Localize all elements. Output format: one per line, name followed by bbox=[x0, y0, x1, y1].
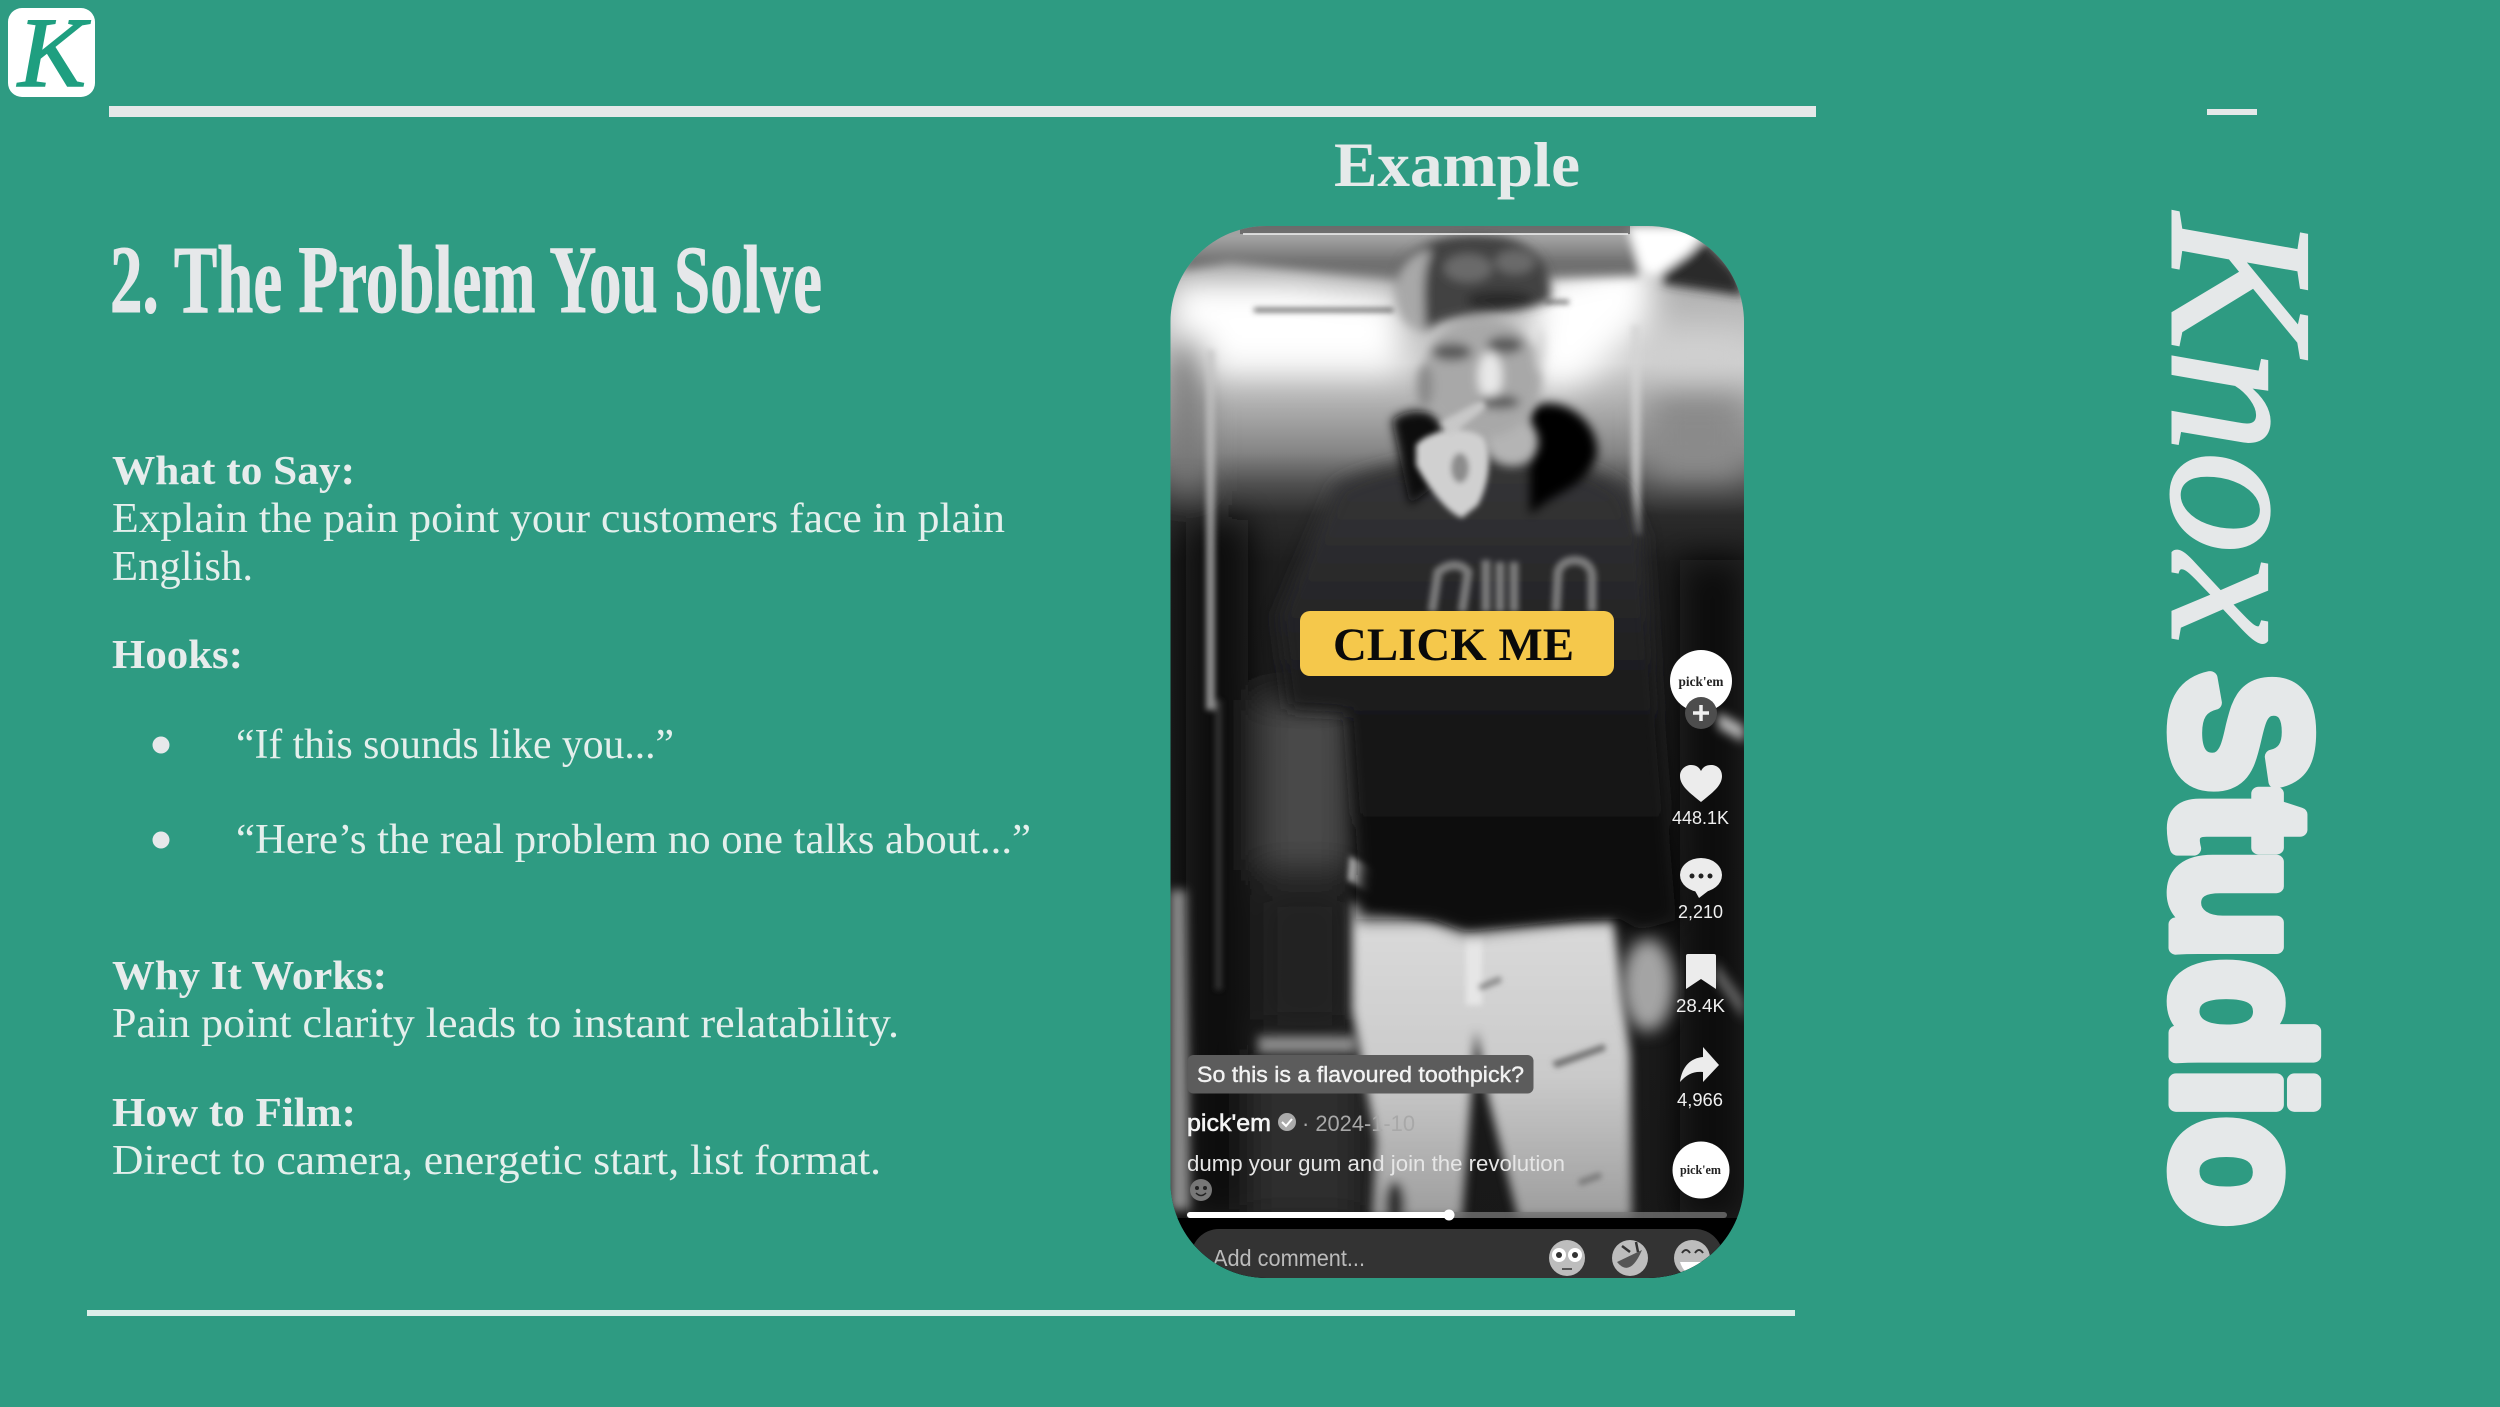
text block: why it works: Why It Works: bbox=[112, 952, 387, 998]
bottom black bar bbox=[1170, 1218, 1745, 1278]
username and date: · 2024-1-10 bbox=[1302, 1111, 1415, 1136]
elevator door frames bbox=[1206, 300, 1641, 990]
username and date bbox=[1188, 1113, 1414, 1136]
comment caption bbox=[1188, 1055, 1534, 1094]
comment bar bbox=[1194, 1229, 1720, 1278]
emoji: flushed bbox=[1549, 1240, 1585, 1276]
text block: how to film: Direct to camera, energetic start, list format. bbox=[112, 1138, 881, 1184]
click me button bbox=[1300, 611, 1614, 676]
click me button: CLICK ME bbox=[1333, 619, 1574, 671]
icon: share with count: 4,966 bbox=[1677, 1090, 1723, 1110]
wordmark: Knox: Knox bbox=[2128, 211, 2354, 644]
icon: bookmark with count bbox=[1676, 954, 1725, 1016]
vertical wordmark bbox=[2128, 211, 2354, 1226]
title: 2. The Problem You Solve bbox=[110, 226, 822, 333]
text block: what to say: Explain the pain point your customers face in plain bbox=[112, 496, 1005, 542]
man: raised hand bbox=[1416, 400, 1489, 518]
text block: why it works: Pain point clarity leads to instant relatability. bbox=[112, 1001, 899, 1047]
progress bar bbox=[1187, 1210, 1727, 1220]
icon: follow avatar bbox=[1670, 650, 1732, 729]
text block: why it works bbox=[112, 952, 899, 1047]
man: lowered hand bbox=[1622, 939, 1674, 1031]
video description bbox=[1187, 1151, 1565, 1201]
emoji: rolling laughing bbox=[1612, 1240, 1648, 1276]
text block: hooks: “If this sounds like you...” bbox=[236, 722, 674, 768]
icon: share with count bbox=[1677, 1047, 1723, 1110]
comment bar: Add comment... bbox=[1213, 1245, 1365, 1271]
phone screenshot panel bbox=[1170, 226, 1745, 1299]
video description: dump your gum and join the revolution bbox=[1187, 1151, 1565, 1176]
video still bbox=[1170, 226, 1745, 1278]
text block: how to film bbox=[112, 1089, 881, 1184]
text block: what to say bbox=[112, 447, 1005, 590]
hoodie lettering bbox=[1432, 560, 1592, 612]
icon: comment with count: 2,210 bbox=[1678, 902, 1723, 922]
top notch line bbox=[1240, 226, 1630, 235]
text block: hooks: “Here’s the real problem no one talks about...” bbox=[236, 817, 1031, 863]
text block: what to say: English. bbox=[112, 544, 253, 590]
text block: hooks: Hooks: bbox=[112, 631, 243, 677]
man: hoodie bbox=[1277, 456, 1676, 932]
emoji: grinning bbox=[1674, 1240, 1710, 1276]
comment caption: So this is a flavoured toothpick? bbox=[1197, 1062, 1524, 1087]
man: pants bbox=[1352, 902, 1632, 1229]
text block: what to say: What to Say: bbox=[112, 447, 355, 493]
short right rule bbox=[2207, 109, 2257, 115]
username and date: pick'em bbox=[1187, 1110, 1271, 1137]
icon: heart with count: 448.1K bbox=[1672, 808, 1729, 828]
wordmark: Studio: Studio bbox=[2135, 673, 2347, 1226]
icon: sound avatar: pick'em bbox=[1680, 1162, 1721, 1177]
logo badge: K bbox=[16, 0, 90, 108]
bottom rule bbox=[87, 1310, 1795, 1316]
example heading: Example bbox=[1334, 129, 1580, 200]
icon: follow avatar: pick'em bbox=[1678, 675, 1724, 690]
man: head bbox=[1396, 235, 1551, 466]
top rule bbox=[109, 106, 1816, 117]
icon: heart with count bbox=[1672, 765, 1729, 828]
text block: hooks bbox=[112, 631, 1031, 863]
text block: how to film: How to Film: bbox=[112, 1089, 356, 1135]
icon: sound avatar bbox=[1672, 1142, 1730, 1198]
icon: bookmark with count: 28.4K bbox=[1676, 996, 1725, 1016]
icon: comment with count bbox=[1678, 858, 1723, 922]
